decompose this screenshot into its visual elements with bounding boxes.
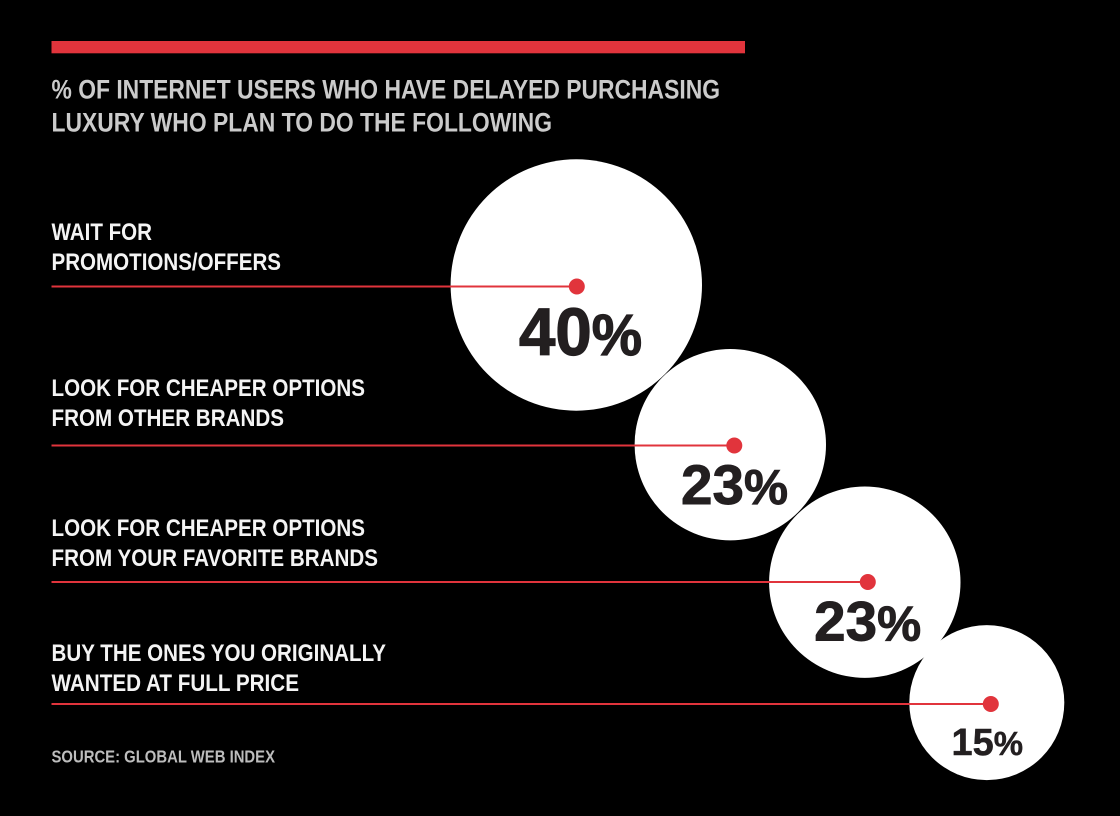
title — [52, 74, 720, 138]
row: buy at full price, 15% — [52, 625, 1064, 780]
label: wait for promotions: WAIT FOR — [52, 219, 152, 246]
dot: 40% — [569, 278, 585, 294]
label: other brands — [52, 375, 365, 432]
dot: 23% other brands — [726, 438, 742, 454]
bubble: 40% — [451, 159, 702, 411]
label: other brands: LOOK FOR CHEAPER OPTIONS — [52, 375, 365, 402]
title: % OF INTERNET USERS WHO HAVE DELAYED PURCHASING — [52, 74, 720, 104]
dot: 15% — [983, 696, 999, 712]
label: favorite brands — [52, 515, 378, 572]
value: 40%: 40% — [519, 295, 642, 370]
value: 23% other brands: 23% — [681, 453, 788, 516]
label: full price: WANTED AT FULL PRICE — [52, 670, 299, 697]
leader line: 23% favorite brands — [52, 581, 868, 583]
dot: 23% favorite brands — [860, 574, 876, 590]
bubble: 23% other brands — [635, 349, 826, 540]
label: favorite brands: FROM YOUR FAVORITE BRANDS — [52, 545, 378, 572]
row: cheaper options favorite brands, 23% — [52, 486, 960, 678]
source note: SOURCE: GLOBAL WEB INDEX — [52, 746, 275, 766]
value: 15%: 15% — [952, 722, 1023, 764]
title: LUXURY WHO PLAN TO DO THE FOLLOWING — [52, 108, 552, 138]
leader line: 23% other brands — [52, 444, 734, 446]
label: other brands: FROM OTHER BRANDS — [52, 405, 284, 432]
label: full price — [52, 640, 386, 697]
row: cheaper options other brands, 23% — [52, 349, 826, 540]
label: full price: BUY THE ONES YOU ORIGINALLY — [52, 640, 386, 667]
row: wait for promotions, 40% — [52, 159, 702, 411]
value: 23% favorite brands: 23% — [814, 590, 921, 652]
leader line: 15% — [52, 703, 991, 705]
label: wait for promotions: PROMOTIONS/OFFERS — [52, 249, 281, 276]
label: favorite brands: LOOK FOR CHEAPER OPTIONS — [52, 515, 365, 542]
label: wait for promotions — [52, 219, 281, 276]
bubble: 23% favorite brands — [769, 486, 960, 678]
bubble: 15% — [909, 625, 1064, 780]
leader line: 40% — [52, 286, 577, 288]
top red bar — [52, 41, 745, 53]
